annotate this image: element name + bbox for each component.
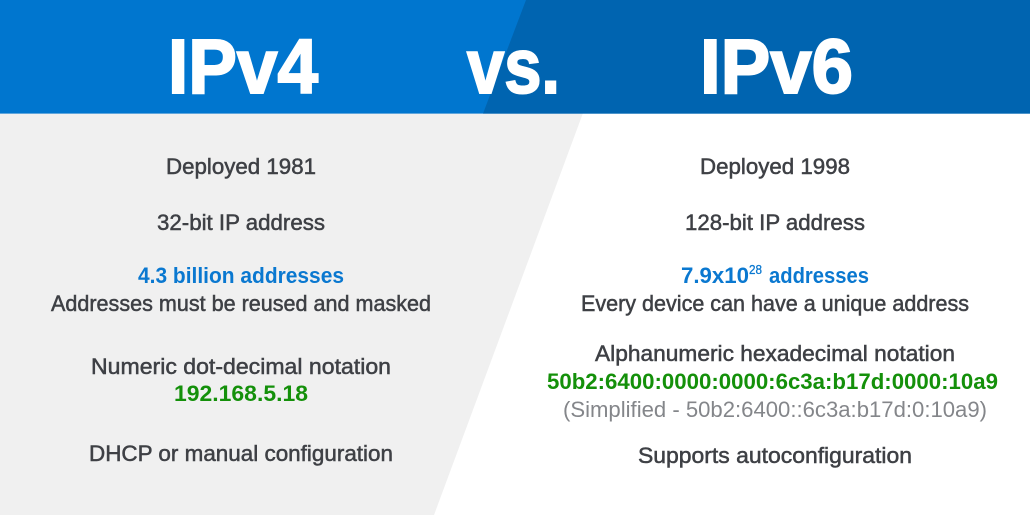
text: 128-bit: 128-bit IP address — [685, 210, 865, 235]
text: 7.9x10^28 addresses: addresses — [769, 263, 869, 288]
text: autoconfiguration: Supports autoconfiguration — [638, 443, 912, 468]
panel: IPv6 facts — [547, 154, 998, 468]
text: example IPv4 address: 192.168.5.18 — [174, 381, 308, 406]
text: numeric notation: Numeric dot-decimal notation — [91, 354, 391, 379]
text: DHCP: DHCP or manual configuration — [89, 441, 393, 466]
text: addresses must be reused: Addresses must be reused and masked — [51, 291, 431, 316]
heading: IPv4: IPv4 — [168, 24, 318, 110]
text: 7.9x10^28 addresses — [681, 262, 869, 288]
text: 7.9x10^28 addresses: 7.9x10 — [681, 263, 749, 288]
panel: IPv4 facts — [51, 154, 431, 466]
heading: IPv6: IPv6 — [700, 24, 853, 110]
panel: header bar — [0, 0, 1030, 114]
text: deployed 1981: Deployed 1981 — [166, 154, 316, 179]
text: 4.3 billion addresses: 4.3 billion addresses — [138, 263, 344, 288]
heading: vs.: vs. — [467, 24, 560, 110]
text: every device: Every device can have a unique address — [581, 291, 969, 316]
text: 32-bit: 32-bit IP address — [157, 210, 325, 235]
text: alphanumeric notation: Alphanumeric hexadecimal notation — [595, 341, 955, 366]
text: deployed 1998: Deployed 1998 — [700, 154, 850, 179]
text: simplified address: (Simplified - 50b2:6400::6c3a:b17d:0:10a9) — [563, 397, 987, 422]
text: example IPv6 address: 50b2:6400:0000:0000:6c3a:b17d:0000:10a9 — [547, 369, 998, 394]
panel: IPv4 grey background — [0, 113, 583, 515]
text: 7.9x10^28 addresses: 28 — [749, 262, 762, 277]
